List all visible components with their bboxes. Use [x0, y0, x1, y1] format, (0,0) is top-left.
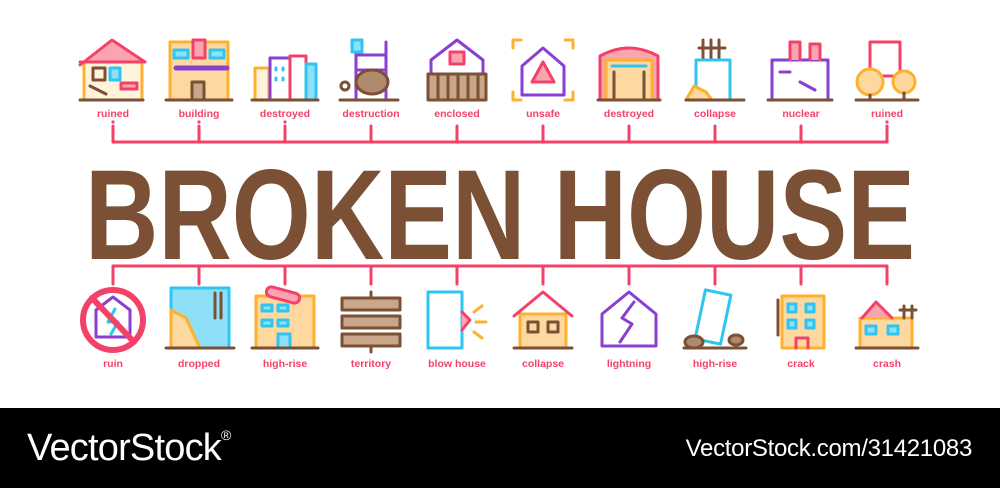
bottom labels	[103, 358, 901, 370]
bottom labels: dropped	[178, 358, 220, 370]
top connector lines	[113, 126, 887, 284]
top labels: building	[179, 108, 219, 120]
icon: destroyed garage	[598, 48, 660, 100]
icon: crash house	[856, 302, 918, 348]
icon: high-rise broken	[252, 286, 318, 348]
icon: high-rise tilted	[684, 290, 746, 348]
top labels	[97, 108, 903, 120]
bottom labels: crash	[873, 358, 901, 370]
top labels: destroyed	[260, 108, 310, 120]
icon: blow house	[428, 292, 486, 348]
bottom labels: territory	[351, 358, 391, 370]
icon: ruined trees	[856, 42, 918, 100]
top labels: collapse	[694, 108, 736, 120]
top labels: enclosed	[434, 108, 480, 120]
footer bar	[0, 408, 1000, 488]
bottom labels: crack	[787, 358, 815, 370]
bottom labels: high-rise	[263, 358, 307, 370]
icon: collapse tower	[686, 40, 744, 100]
bottom labels: ruin	[103, 358, 123, 370]
footer brand: VectorStock®	[27, 427, 230, 469]
icon: destruction	[340, 40, 398, 100]
icon: enclosed	[428, 40, 486, 100]
top labels: ruined	[871, 108, 903, 120]
top labels: ruined	[97, 108, 129, 120]
footer url: VectorStock.com/31421083	[686, 435, 972, 462]
icon: ruin prohibited	[83, 290, 143, 350]
top labels: nuclear	[782, 108, 820, 120]
icon: territory signs	[342, 292, 400, 352]
icon: collapse house	[514, 292, 572, 348]
icon: ruined house	[80, 40, 145, 100]
icon: lightning cracked house	[602, 292, 656, 346]
bottom labels: lightning	[607, 358, 651, 370]
icon: building	[166, 40, 232, 100]
connector dots	[111, 120, 889, 124]
bottom labels: blow house	[428, 358, 486, 370]
icon: dropped wall	[166, 288, 234, 348]
top labels: unsafe	[526, 108, 560, 120]
icon: nuclear	[768, 42, 832, 100]
top labels: destruction	[342, 108, 400, 120]
bottom labels: collapse	[522, 358, 564, 370]
top labels: destroyed	[604, 108, 654, 120]
icon: unsafe	[513, 40, 573, 100]
icon: crack building	[778, 296, 824, 348]
bottom labels: high-rise	[693, 358, 737, 370]
icon: destroyed city	[252, 56, 318, 100]
